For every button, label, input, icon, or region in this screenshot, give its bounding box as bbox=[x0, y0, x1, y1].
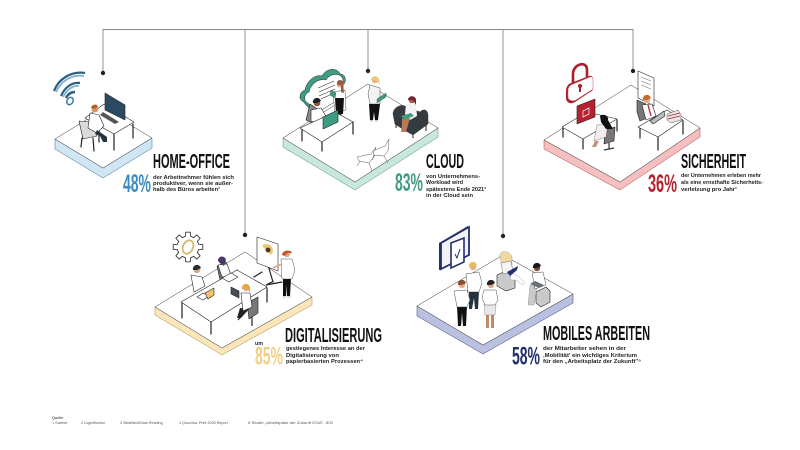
presentation board bbox=[254, 237, 282, 285]
icon: tablet and phone bbox=[439, 226, 469, 270]
description: ‚Mobilität' ein wichtiges Kriterium bbox=[543, 353, 637, 359]
description: Workload wird bbox=[426, 180, 464, 186]
desk with seated man bbox=[300, 98, 353, 151]
percentage: 58% bbox=[512, 342, 540, 370]
panel: cloud bbox=[283, 69, 486, 199]
description: papierbasierten Prozessen⁴ bbox=[286, 359, 363, 365]
heading: MOBILES ARBEITEN bbox=[543, 323, 650, 345]
source footnotes: 3 StatsNext/Dark Reading bbox=[120, 421, 163, 425]
platform bbox=[417, 255, 573, 354]
source footnotes: Quelle bbox=[52, 416, 63, 420]
seated blonde with laptop bbox=[497, 252, 525, 291]
description: halb des Büros arbeiten¹ bbox=[153, 186, 220, 193]
source footnotes bbox=[52, 416, 333, 425]
panel: mobiles arbeiten bbox=[417, 226, 650, 370]
description: gestiegenes Interesse an der bbox=[286, 346, 366, 352]
panel: home-office bbox=[54, 73, 235, 198]
icon: wifi bbox=[54, 73, 85, 106]
left desk with woman bbox=[562, 99, 617, 150]
standing woman bbox=[273, 251, 295, 298]
woman with skirt bbox=[482, 280, 498, 328]
source footnotes: 2 LogicMonitor bbox=[81, 421, 106, 425]
armchair with person bbox=[393, 96, 428, 138]
description: spätestens Ende 2021³ bbox=[426, 186, 486, 193]
platform bbox=[283, 84, 438, 190]
percentage: 48% bbox=[123, 170, 151, 198]
percentage: 83% bbox=[395, 169, 423, 197]
icon: lock bbox=[566, 64, 593, 103]
source footnotes: 1 Gartner bbox=[52, 421, 68, 425]
description: als eine ernsthafte Sicherheits- bbox=[681, 180, 763, 186]
heading: CLOUD bbox=[426, 151, 464, 173]
panel: digitalisierung bbox=[155, 232, 382, 370]
description bbox=[153, 175, 235, 193]
heading: DIGITALISIERUNG bbox=[285, 325, 382, 347]
source footnotes: 5 Studie „Arbeitsplatz der Zukunft 2018", IDG bbox=[248, 421, 333, 425]
woman with tablet bbox=[330, 80, 346, 116]
description bbox=[286, 346, 366, 365]
icon: document bbox=[638, 71, 654, 106]
source footnotes: 4 Quocirca, Print 2025 Report bbox=[179, 421, 228, 425]
table with team bbox=[181, 256, 267, 334]
percentage: 36% bbox=[648, 170, 677, 198]
prefix: um bbox=[255, 341, 263, 347]
icon: cloud bbox=[300, 69, 345, 112]
description: für den „Arbeitsplatz der Zukunft"⁵ bbox=[543, 359, 641, 365]
standing person with tablet bbox=[368, 76, 386, 122]
platform bbox=[155, 252, 312, 355]
description: Digitalisierung von bbox=[286, 353, 340, 359]
platform bbox=[55, 109, 152, 178]
connector lines bbox=[101, 30, 635, 238]
seated man bbox=[528, 263, 550, 307]
icon: gear bbox=[173, 232, 203, 262]
percentage: 85% bbox=[255, 342, 283, 370]
description: produktiver, wenn sie außer- bbox=[153, 181, 233, 187]
desk with monitor bbox=[85, 93, 134, 150]
panel: sicherheit bbox=[544, 64, 763, 198]
description: der Unternehmen erleben mehr bbox=[681, 173, 762, 179]
right desk with man bbox=[637, 95, 683, 150]
description bbox=[543, 346, 641, 365]
description bbox=[681, 173, 763, 193]
description bbox=[426, 174, 486, 199]
platform bbox=[544, 85, 700, 190]
chairs bbox=[357, 139, 389, 171]
person at desk bbox=[79, 105, 107, 151]
description: von Unternehmens- bbox=[426, 174, 480, 180]
heading: HOME-OFFICE bbox=[153, 151, 230, 173]
description: der Mitarbeiter sehen in der bbox=[543, 346, 627, 352]
man with dark trousers bbox=[466, 262, 482, 309]
description: in der Cloud sein bbox=[426, 193, 474, 199]
description: der Arbeitnehmer fühlen sich bbox=[153, 175, 235, 181]
man with black trousers bbox=[454, 280, 470, 326]
description: verletzung pro Jahr¹ bbox=[681, 186, 737, 193]
heading: SICHERHEIT bbox=[681, 151, 746, 173]
